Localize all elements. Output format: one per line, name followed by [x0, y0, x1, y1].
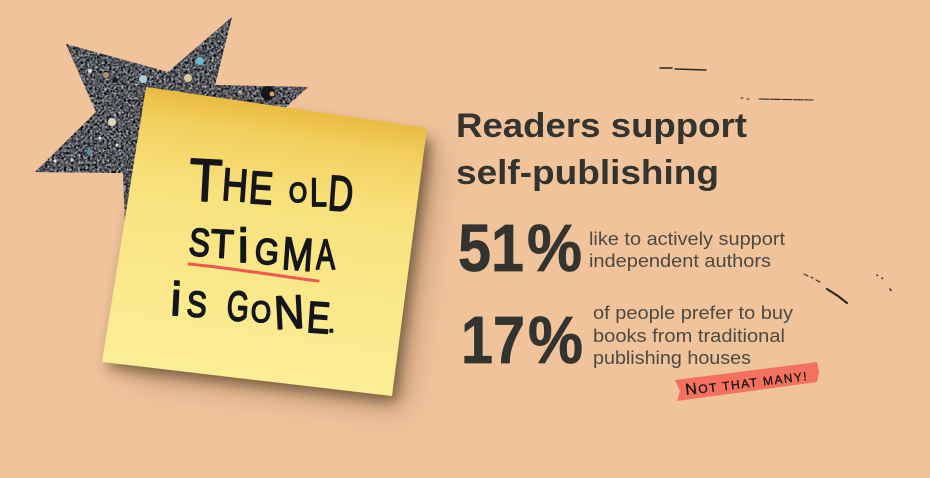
note shadow	[108, 100, 440, 410]
paper scratches	[660, 68, 891, 303]
handwritten message: E	[305, 293, 332, 343]
handwritten message: L	[310, 171, 327, 215]
handwritten message: i	[238, 219, 248, 272]
stat: 17%	[461, 302, 794, 378]
stat: 17%: publishing houses	[593, 347, 751, 368]
handwritten message: S	[187, 221, 212, 266]
handwritten message: E	[247, 161, 275, 215]
handwritten message: D	[326, 165, 355, 223]
stat: 51%: like to actively support	[589, 228, 785, 249]
heading: self-publishing	[456, 154, 719, 192]
infographic canvas	[35, 17, 892, 420]
handwritten message: T	[210, 222, 235, 267]
stat: 17%: of people prefer to buy	[593, 302, 794, 323]
stat: 51%: 51	[458, 211, 524, 286]
callout: not that many	[675, 362, 819, 401]
callout: not that many: NOT THAT MANY!	[684, 367, 808, 399]
handwritten message: S	[185, 283, 208, 325]
star with glitter texture	[30, 15, 315, 230]
handwritten message: i	[169, 272, 183, 325]
sticky note	[102, 87, 427, 396]
handwritten message: O	[251, 296, 271, 329]
handwritten message: .	[328, 311, 335, 338]
stat: 51%	[458, 211, 785, 286]
stat: 51%: independent authors	[589, 250, 771, 271]
handwritten message: T	[187, 146, 224, 215]
handwritten message: A	[316, 231, 335, 279]
red underline	[189, 264, 318, 281]
heading	[456, 107, 747, 192]
heading: Readers support	[456, 107, 747, 145]
handwritten message: G	[253, 230, 281, 273]
handwritten message: H	[220, 158, 250, 212]
handwritten message: O	[289, 177, 307, 208]
handwritten message: G	[225, 282, 251, 330]
handwritten message: M	[280, 227, 315, 281]
handwritten message	[169, 146, 355, 343]
stat: 17%: books from traditional	[593, 325, 785, 346]
stat: 17%: %	[528, 303, 583, 378]
handwritten message: N	[273, 285, 305, 339]
stat: 17%: 17	[461, 303, 525, 378]
stat: 51%: %	[527, 211, 582, 286]
